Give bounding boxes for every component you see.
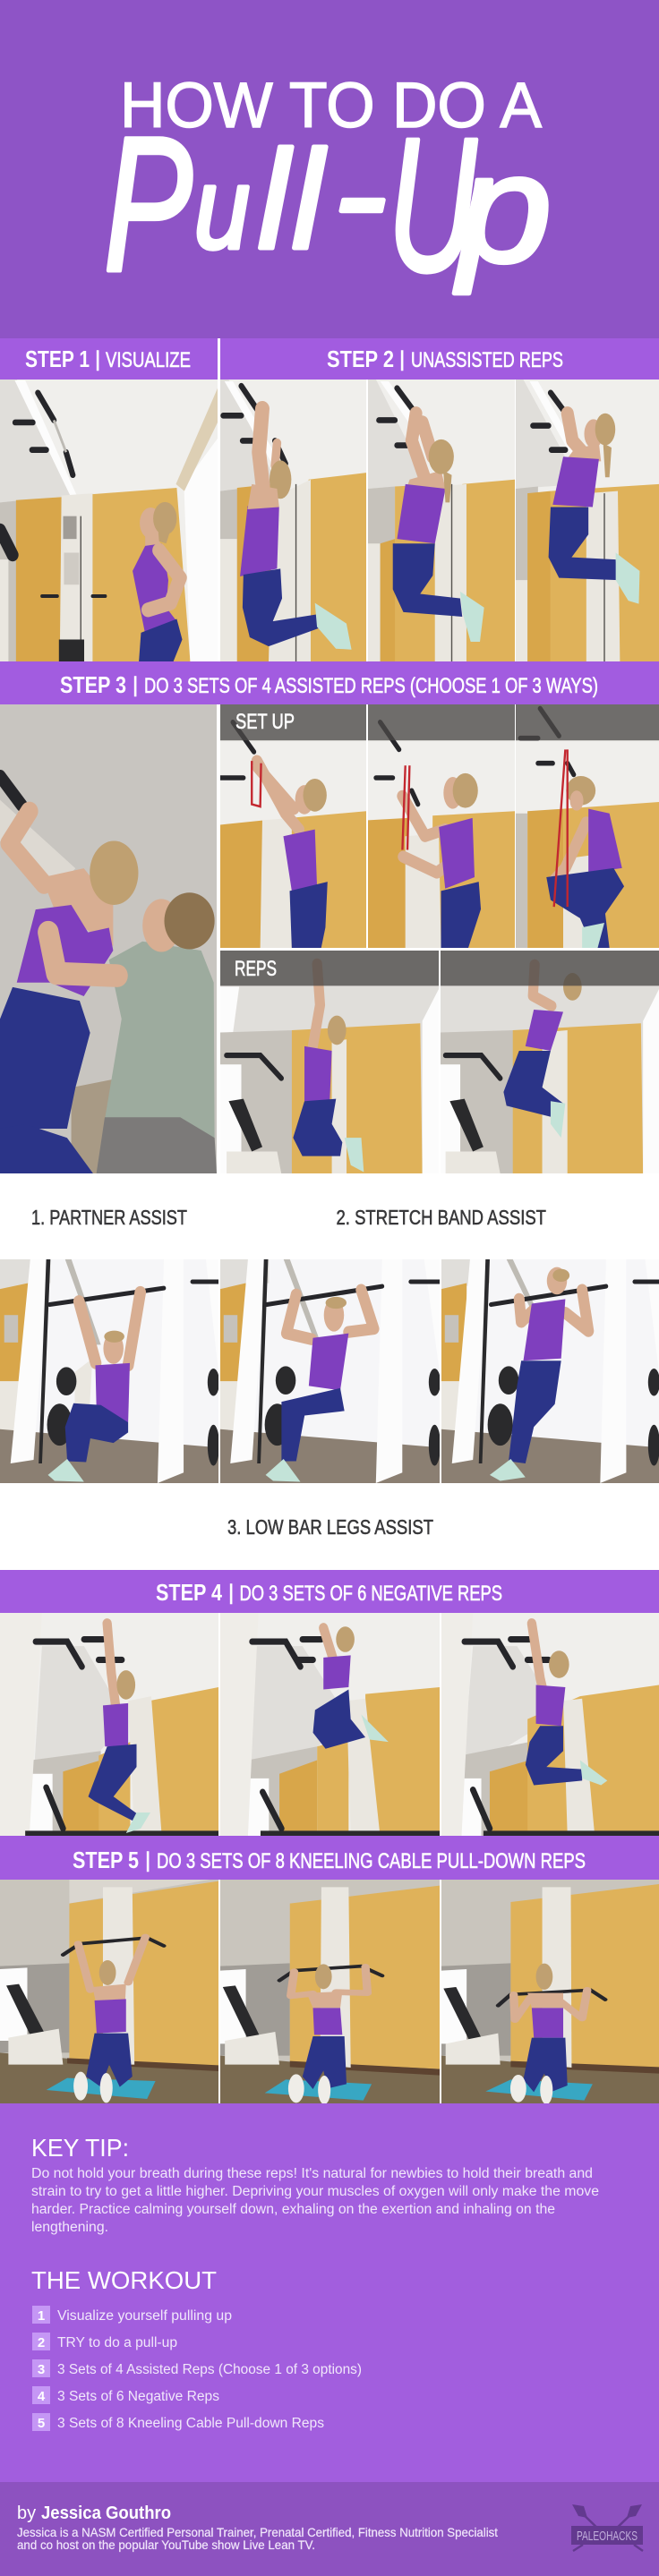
photo: kneeling pull-down low xyxy=(441,1880,659,2103)
text block: key tip body xyxy=(31,2166,599,2235)
heading: the workout: THE WORKOUT xyxy=(31,2266,217,2294)
step 3 heading band: | xyxy=(133,673,138,697)
header panel xyxy=(0,0,659,338)
list: workout items: TRY to do a pull-up xyxy=(57,2335,177,2350)
caption: low bar legs assist: 3. LOW BAR LEGS ASSIST xyxy=(227,1515,433,1539)
step 4 heading band xyxy=(0,1570,659,1613)
photo: negative rep lower xyxy=(441,1613,659,1836)
step 1 heading band: STEP 1 xyxy=(25,345,90,372)
title: l xyxy=(258,123,293,278)
list: workout items: 3 Sets of 6 Negative Reps xyxy=(57,2389,219,2404)
step 1 heading band: | xyxy=(95,347,100,371)
step 2 heading band: UNASSISTED REPS xyxy=(411,348,563,372)
list: workout items: 5 xyxy=(38,2416,45,2431)
figure: woman tucked at top xyxy=(313,1626,389,1749)
photo: low bar legs assist two xyxy=(220,1259,440,1483)
photo: low bar legs assist one xyxy=(0,1259,218,1483)
photo: stretch band set up one xyxy=(220,704,366,948)
title xyxy=(104,71,552,311)
step 5 heading band: | xyxy=(145,1848,150,1872)
figure: woman kneeling arms extended xyxy=(63,1937,164,2103)
step 2 heading band xyxy=(220,338,659,380)
step 4 heading band: DO 3 SETS OF 6 NEGATIVE REPS xyxy=(240,1582,502,1606)
list: workout items: 3 Sets of 8 Kneeling Cable Pull-down Reps xyxy=(57,2416,324,2431)
step 3 heading band xyxy=(0,661,659,704)
photo: unassisted rep mid xyxy=(368,380,515,661)
step 5 heading band xyxy=(0,1836,659,1880)
caption: stretch band assist: 2. STRETCH BAND ASSIST xyxy=(337,1206,546,1229)
author bio: and co host on the popular YouTube show Live Lean TV. xyxy=(17,2538,315,2552)
step 4 heading band: STEP 4 xyxy=(156,1579,222,1606)
photo: unassisted rep start xyxy=(220,380,366,661)
list: workout items: Visualize yourself pulling up xyxy=(57,2308,232,2324)
figure: woman band rep high xyxy=(503,965,582,1138)
photo: kneeling pull-down top xyxy=(0,1880,218,2103)
step 4 heading band: | xyxy=(228,1581,234,1605)
figure: woman mid descent xyxy=(526,1624,607,1785)
photo: negative rep start xyxy=(220,1613,440,1836)
figure: woman kneeling mid pull xyxy=(279,1964,382,2104)
title: HOW TO DO A xyxy=(120,71,543,141)
panel: key tip and workout xyxy=(0,2103,659,2482)
photo: visualize standing xyxy=(0,380,218,661)
label: set up: SET UP xyxy=(235,710,295,734)
figure: woman band rep low xyxy=(293,964,364,1172)
photo: partner assist xyxy=(0,704,217,1173)
figure: woman lowering high xyxy=(89,1624,150,1833)
panel: author footer xyxy=(0,2482,659,2576)
figure: woman looking up xyxy=(133,502,183,661)
title: P xyxy=(104,98,193,311)
photo: low bar legs assist three xyxy=(441,1259,659,1483)
step 1 heading band: VISUALIZE xyxy=(106,348,191,372)
figure: male spotter xyxy=(48,892,217,1173)
figure: woman attaching band xyxy=(252,761,328,948)
photo: band reps top xyxy=(441,951,659,1173)
figure: woman kneeling bar behind head xyxy=(498,1964,605,2104)
photo: stretch band set up two xyxy=(368,704,515,948)
author name: by xyxy=(17,2503,36,2523)
step 5 heading band: STEP 5 xyxy=(73,1847,139,1873)
figure: woman pulling xyxy=(0,811,138,1173)
photo: negative rep top xyxy=(0,1613,218,1836)
figure: woman hanging xyxy=(240,409,352,650)
step 2 heading band: | xyxy=(399,347,405,371)
photo: stretch band set up three xyxy=(516,704,659,948)
figure: woman mid pull xyxy=(393,414,484,642)
figure: woman half pull xyxy=(266,1290,373,1481)
list: workout items: 3 Sets of 4 Assisted Reps (Choose 1 of 3 options) xyxy=(57,2362,362,2377)
label: reps: REPS xyxy=(235,957,277,981)
figure: woman at top of pull xyxy=(549,414,639,604)
title: - xyxy=(333,114,387,274)
list: workout items xyxy=(32,2306,362,2431)
title: l xyxy=(292,123,327,278)
author name: Jessica Gouthro xyxy=(41,2503,171,2523)
list: workout items: 1 xyxy=(38,2308,45,2324)
author bio: Jessica is a NASM Certified Personal Trainer, Prenatal Certified, Fitness Nutrition Specialist xyxy=(17,2525,498,2539)
step 2 heading band: STEP 2 xyxy=(327,345,394,372)
list: workout items: 3 xyxy=(38,2362,45,2377)
logo: paleohacks xyxy=(571,2504,643,2551)
step 3 heading band: STEP 3 xyxy=(60,671,126,698)
title: u xyxy=(194,144,250,273)
caption: partner assist: 1. PARTNER ASSIST xyxy=(31,1206,187,1229)
title: U xyxy=(388,98,477,311)
photo: unassisted rep top xyxy=(516,380,659,661)
text block: key tip body: lengthening. xyxy=(31,2220,108,2235)
photo: band reps hanging xyxy=(220,951,439,1173)
figure: woman stretching band xyxy=(402,765,481,948)
text block: key tip body: Do not hold your breath during these reps! It's natural for newbies to hold their breath and xyxy=(31,2166,593,2181)
figure: woman knees bent xyxy=(47,1292,141,1481)
list: workout items: 2 xyxy=(38,2335,45,2350)
list: workout items: 4 xyxy=(38,2389,46,2404)
heading: key tip: KEY TIP: xyxy=(31,2134,129,2162)
author bio xyxy=(17,2525,498,2552)
step 1 heading band xyxy=(0,338,218,380)
figure: woman chin over bar xyxy=(490,1267,588,1480)
photo: kneeling pull-down mid xyxy=(220,1880,440,2103)
text block: key tip body: strain to try to get a little higher. Depriving your muscles of oxygen will only make the move xyxy=(31,2184,599,2199)
title: p xyxy=(454,123,552,294)
text block: key tip body: harder. Practice calming yourself down, exhaling on the exertion and inhaling on the xyxy=(31,2202,555,2217)
figure: woman stepping into band xyxy=(546,749,624,948)
